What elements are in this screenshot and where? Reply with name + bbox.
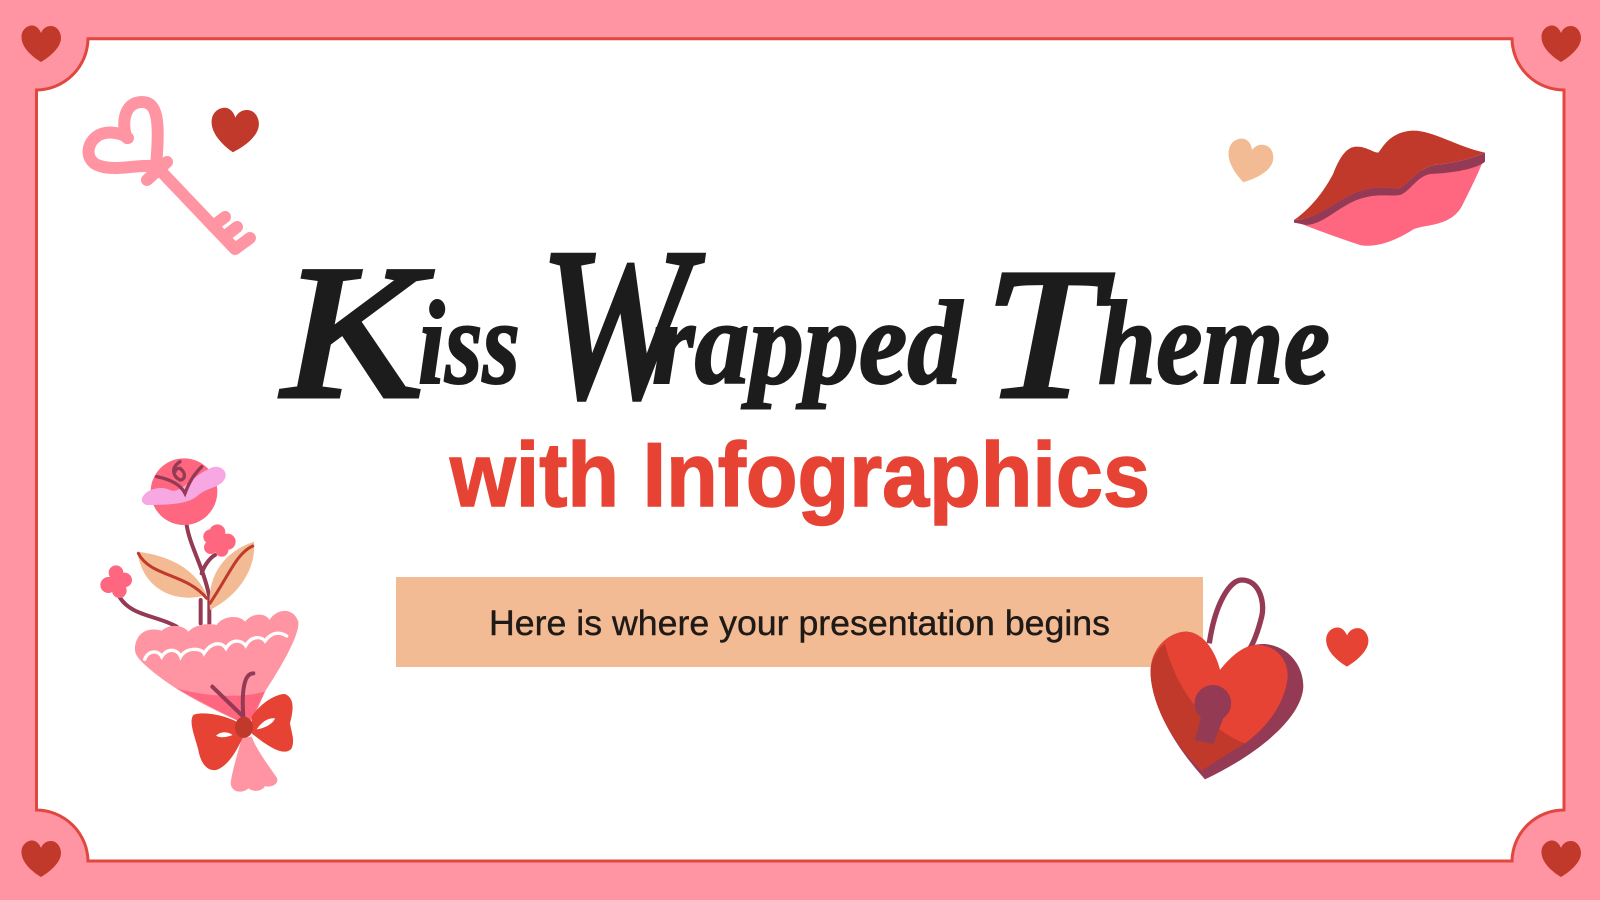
title: W (540, 204, 704, 443)
bow (192, 694, 293, 770)
rose head (142, 458, 226, 525)
small flowers (100, 524, 236, 598)
title: heme (1098, 276, 1330, 409)
wrap scallop line (145, 633, 287, 659)
subtitle: with Infographics: with Infographics (449, 425, 1150, 526)
paper wrap (135, 611, 298, 723)
icon: peach heart (1222, 136, 1276, 188)
icon: lips (1294, 131, 1485, 246)
icon: rose bouquet (100, 458, 298, 792)
icon: small red heart near key (210, 107, 260, 154)
title: K (280, 228, 432, 438)
ribbon strands (212, 673, 253, 717)
stems (118, 525, 215, 627)
title: rapped (652, 276, 964, 409)
title (280, 204, 1330, 443)
icon: corner heart bottom right (1542, 840, 1581, 877)
wrap shadow (177, 688, 265, 723)
icon: corner heart top right (1542, 25, 1581, 62)
leaves (137, 542, 254, 610)
icon: heart padlock (1151, 580, 1303, 779)
icon: heart shaped key (89, 102, 250, 249)
title: iss (418, 276, 520, 409)
icon: corner heart bottom left (22, 840, 61, 877)
icon: small red heart near lock (1326, 627, 1368, 667)
bow tail (231, 737, 277, 792)
banner text: Here is where your presentation begins (489, 604, 1110, 643)
banner: peach bar (396, 577, 1203, 667)
title: T (985, 232, 1112, 437)
icon: corner heart top left (22, 25, 61, 62)
